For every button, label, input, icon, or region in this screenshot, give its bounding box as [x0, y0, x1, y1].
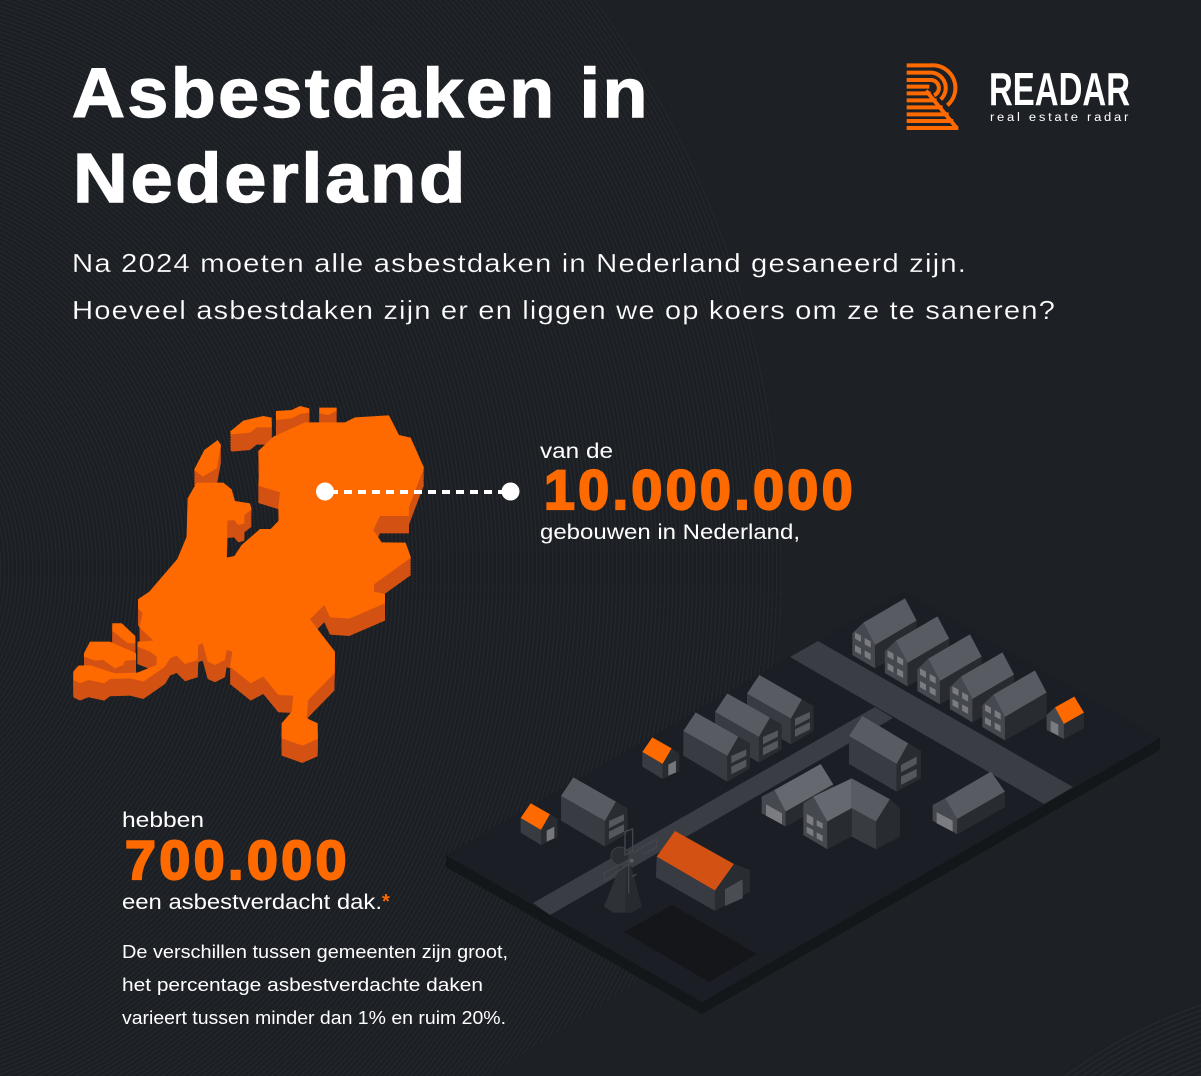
stat: 10.000.000 buildings: 10.000.000: [544, 458, 856, 521]
logo: READAR: [907, 63, 1131, 128]
stat: 700.000 roofs: [122, 809, 390, 914]
L-shaped house: [803, 778, 900, 849]
stat: 700.000 roofs: hebben: [122, 809, 204, 832]
stat: 700.000 roofs: *: [382, 891, 390, 913]
intro text: [72, 248, 1056, 325]
roads: [533, 641, 1073, 915]
stat: 10.000.000 buildings: van de: [540, 440, 613, 463]
house southeast: [933, 772, 1005, 834]
house with garage: [762, 764, 833, 827]
text block: municipal differences: varieert tussen minder dan 1% en ruim 20%.: [122, 1007, 506, 1028]
text block: municipal differences: [122, 941, 508, 1028]
central house: [849, 716, 921, 792]
title: Nederland: [73, 139, 468, 217]
houses west side: [521, 675, 814, 913]
stat: 700.000 roofs: 700.000: [125, 829, 350, 891]
barn with orange roof: [656, 831, 750, 911]
dark field: [624, 905, 757, 982]
intro text: Na 2024 moeten alle asbestdaken in Nederland gesaneerd zijn.: [72, 248, 967, 278]
map: Netherlands: [73, 406, 424, 763]
stat: 10.000.000 buildings: [540, 440, 856, 544]
title: Asbestdaken in: [72, 54, 650, 132]
stat: 10.000.000 buildings: gebouwen in Nederland,: [540, 521, 800, 544]
logo: READAR: READAR: [989, 63, 1130, 115]
houses east side: [762, 598, 1084, 849]
connector line with dots: [316, 482, 520, 500]
title: [72, 54, 650, 217]
isometric town: [446, 591, 1160, 1014]
stat: 700.000 roofs: een asbestverdacht dak.: [122, 891, 382, 914]
text block: municipal differences: De verschillen tussen gemeenten zijn groot,: [122, 941, 508, 962]
text block: municipal differences: het percentage asbestverdachte daken: [122, 974, 483, 995]
windmill: [604, 829, 657, 913]
icon: R mark: [907, 65, 958, 128]
board: [446, 591, 1160, 1014]
small orange house: [1047, 697, 1084, 739]
logo: READAR: real estate radar: [990, 112, 1131, 124]
intro text: Hoeveel asbestdaken zijn er en liggen we op koers om ze te saneren?: [72, 295, 1056, 325]
